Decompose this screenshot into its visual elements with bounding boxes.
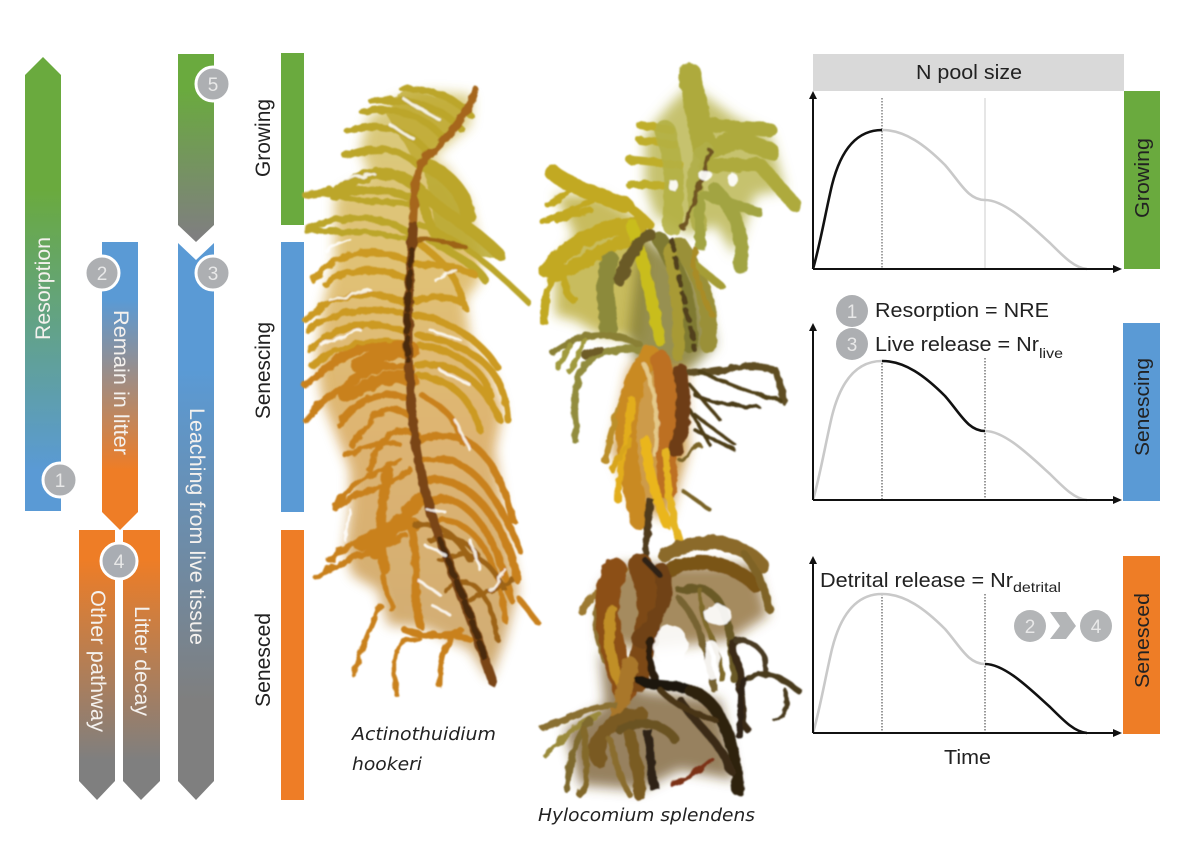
- formula: Live release: live: [1039, 345, 1063, 361]
- badge 2: 2: [97, 264, 107, 285]
- arrow: Leaching from live tissue: Leaching from live tissue: [185, 408, 208, 645]
- badge 1: [43, 463, 77, 497]
- arrow: Resorption: Resorption: [32, 237, 55, 340]
- badge 1: 1: [55, 471, 65, 492]
- white gaps: [654, 170, 738, 680]
- badge 3: [196, 256, 230, 290]
- stage tab: Senesced: Senesced: [1132, 593, 1154, 688]
- sequence: 2 then 4: 2: [1025, 617, 1035, 638]
- stage bar: Senesced: Senesced: [252, 613, 275, 707]
- arrow: Leaching from live tissue: [178, 243, 214, 800]
- heading: N pool size: N pool size: [916, 62, 1022, 84]
- species label: Actinothuidium hookeri: hookeri: [352, 754, 422, 775]
- stage bar: Senesced: [252, 530, 304, 800]
- stage bar: Senescing: Senescing: [252, 322, 275, 419]
- stage bar: Senescing: [252, 242, 304, 512]
- badge 5: 5: [208, 75, 218, 96]
- stage tab: Growing: [1124, 91, 1160, 269]
- chart: growing N pool: [809, 91, 1122, 273]
- chart: senesced N pool: [809, 556, 1122, 737]
- stage tab: Growing: Growing: [1132, 138, 1154, 218]
- brown lower clump: [543, 543, 800, 795]
- arrow: Litter decay: Litter decay: [130, 606, 153, 717]
- formula: Resorption = NRE: 1: [847, 302, 857, 323]
- mid left and right branches: [553, 335, 785, 450]
- stem: [413, 90, 475, 225]
- axis label: Time: Time: [944, 747, 991, 769]
- arrow: Remain in litter: Remain in litter: [109, 310, 132, 455]
- arrow: Resorption: [25, 57, 61, 511]
- sequence: 2 then 4: 4: [1091, 617, 1102, 638]
- arrow: Other pathway: Other pathway: [86, 590, 109, 733]
- formula: Live release: Live release = Nr: [875, 334, 1039, 356]
- stage tab: Senesced: [1123, 556, 1160, 734]
- species label: Actinothuidium hookeri: Actinothuidium: [351, 724, 496, 745]
- formula: Live release: 3: [847, 335, 857, 356]
- formula: Detrital release: detrital: [1013, 579, 1061, 595]
- stage tab: Senescing: [1123, 323, 1160, 501]
- arrow: Litter decay: [123, 530, 160, 800]
- formula: Detrital release: Detrital release = Nr: [820, 570, 1013, 592]
- stage tab: Senescing: Senescing: [1132, 358, 1154, 456]
- central olive clump: [605, 235, 720, 355]
- sequence: 2 then 4: [1014, 610, 1112, 642]
- badge 3: 3: [208, 264, 218, 285]
- moss photo: Hylocomium splendens: [543, 72, 800, 795]
- formula: Resorption = NRE: [836, 295, 1049, 327]
- badge 2: [85, 256, 119, 290]
- left upper fronds: [543, 172, 660, 340]
- light gaps: [322, 100, 505, 615]
- arrow: growing tissue outflow: [178, 54, 214, 242]
- badge 4: [101, 543, 137, 579]
- formula: Detrital release: [820, 570, 1061, 595]
- formula: Resorption = NRE: Resorption = NRE: [875, 300, 1049, 322]
- root stem: [648, 730, 655, 790]
- arrow: Remain in litter: [102, 242, 138, 530]
- badge 4: 4: [114, 552, 125, 573]
- chart: senescing N pool: [809, 323, 1122, 504]
- heading: N pool size: [813, 54, 1124, 91]
- species label: Actinothuidium hookeri: [351, 724, 496, 775]
- stem section: [645, 498, 650, 560]
- formula: Live release: [836, 328, 1063, 361]
- upper fronds: [306, 88, 528, 302]
- stage bar: Growing: Growing: [252, 99, 275, 177]
- stage bar: Growing: [252, 53, 304, 225]
- top frond: [630, 72, 795, 270]
- moss photo: Actinothuidium hookeri: [306, 88, 537, 695]
- arrow: Other pathway: [79, 530, 115, 800]
- orange clump: [605, 355, 710, 542]
- species label: Hylocomium splendens: Hylocomium splendens: [538, 805, 755, 826]
- badge 5: [196, 67, 230, 101]
